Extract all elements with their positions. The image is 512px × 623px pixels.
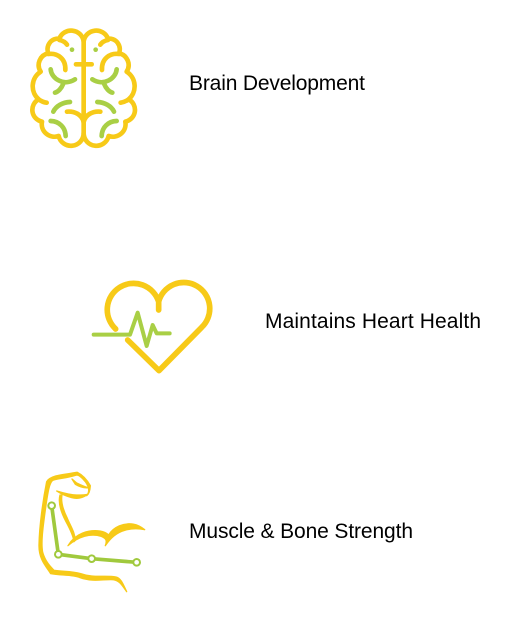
label: muscle and bone strength: Muscle & Bone Strength — [189, 520, 413, 543]
arm outline — [39, 472, 145, 592]
arm skeleton — [48, 502, 140, 566]
brain right outline — [84, 31, 135, 146]
icon: heart — [94, 282, 210, 371]
label: brain development: Brain Development — [189, 72, 365, 95]
label: maintains heart health: Maintains Heart Health — [265, 310, 481, 333]
icon: brain — [32, 31, 135, 146]
brain inner folds left — [51, 69, 75, 136]
icon: flexed arm — [39, 472, 145, 592]
brain left outline — [32, 31, 92, 146]
brain dots — [70, 47, 98, 52]
brain inner folds right — [92, 69, 117, 136]
pulse line — [94, 313, 170, 346]
heart outline — [107, 282, 210, 371]
